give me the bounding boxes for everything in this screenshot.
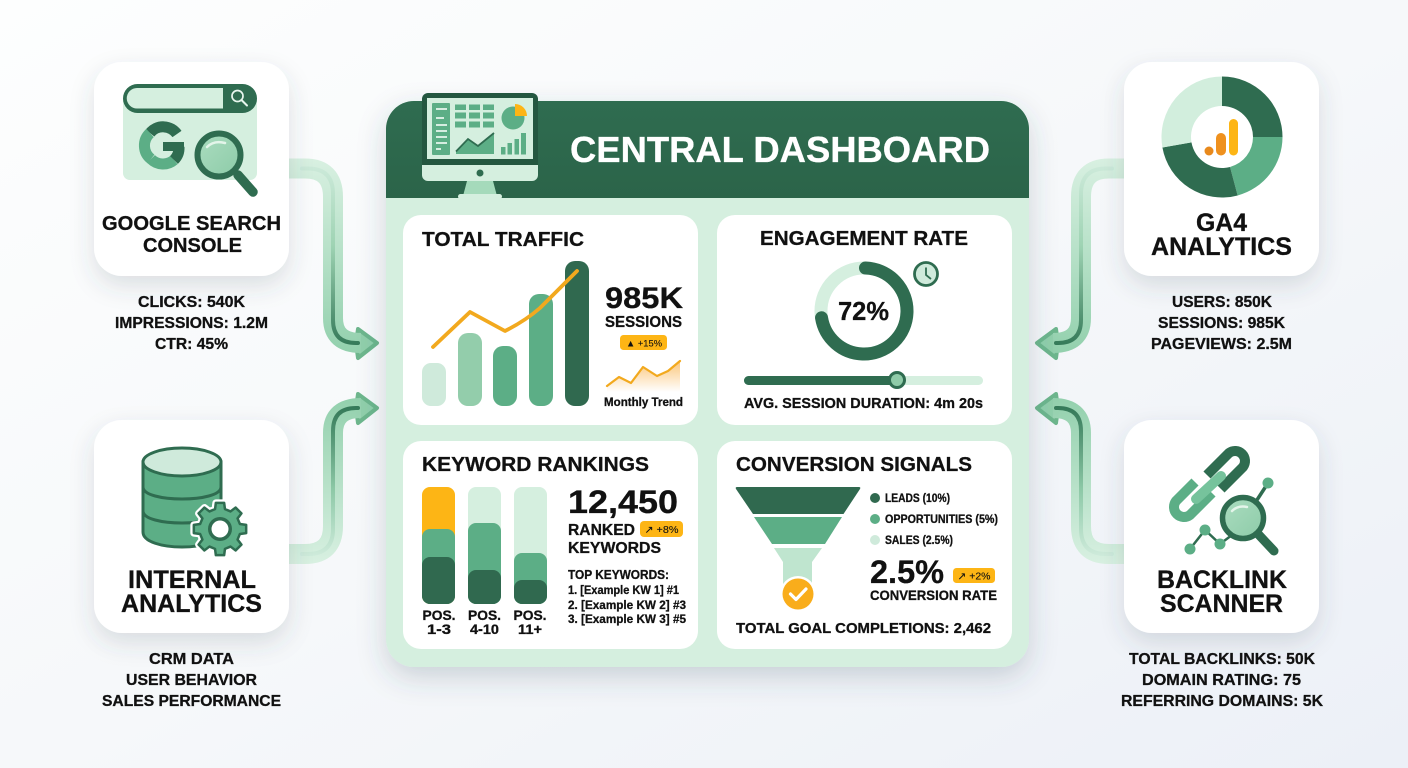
legend: SALES (2.5%): [885, 535, 953, 547]
heading: TOTAL TRAFFIC: [422, 229, 584, 251]
mini chart: monthly trend: [604, 361, 683, 409]
card title: [1151, 209, 1292, 261]
metric: sessions: [605, 282, 683, 331]
legend: [870, 493, 998, 547]
card title: [1157, 566, 1287, 618]
list: top keywords: TOP KEYWORDS:: [568, 568, 669, 582]
arrow: Google Search Console to dashboard: [289, 168, 377, 358]
text block: Search Console stats: CTR: 45%: [155, 336, 228, 353]
bar chart: traffic: [422, 261, 589, 406]
stacked bars: positions: 4-10: [470, 621, 499, 637]
metric: sessions: SESSIONS: [605, 314, 682, 331]
metric: conversion rate: CONVERSION RATE: [870, 587, 997, 603]
list: top keywords: 2. [Example KW 2] #3: [568, 598, 686, 612]
panel: keyword rankings: [403, 441, 698, 649]
icon: clock: [914, 262, 938, 286]
heading: ENGAGEMENT RATE: [760, 228, 968, 250]
card title: ANALYTICS: [1151, 233, 1292, 261]
card title: [102, 213, 281, 257]
legend: OPPORTUNITIES (5%): [885, 514, 998, 526]
metric: ranked keywords: RANKED: [568, 522, 635, 539]
list: top keywords: 3. [Example KW 3] #5: [568, 612, 686, 626]
list: top keywords: 1. [Example KW 1] #1: [568, 583, 679, 597]
text block: GA4 stats: USERS: 850K: [1172, 294, 1272, 311]
icon: chain link and magnifier: [1174, 451, 1274, 554]
card title: CONSOLE: [143, 235, 242, 257]
icon: GA4 donut: [1162, 76, 1282, 198]
panel: Google Search Console: [94, 62, 289, 276]
panel: GA4 Analytics: [1124, 62, 1319, 276]
icon: monitor: [422, 93, 538, 199]
stacked bars: positions: [422, 487, 547, 637]
badge: +2%: ↗ +2%: [958, 570, 990, 582]
stacked bars: positions: 11+: [518, 621, 542, 637]
icon: database with gear: [143, 448, 246, 555]
text block: Internal Analytics stats: CRM DATA: [149, 651, 234, 668]
text: average session duration: AVG. SESSION DURATION: 4m 20s: [744, 395, 983, 412]
list: top keywords: [568, 568, 686, 626]
text block: Backlink stats: TOTAL BACKLINKS: 50K: [1129, 651, 1315, 668]
arrow: Internal Analytics to dashboard: [289, 394, 377, 554]
card title: GA4: [1196, 209, 1247, 237]
text block: GA4 stats: SESSIONS: 985K: [1158, 315, 1285, 332]
text block: Backlink stats: [1121, 651, 1323, 710]
text block: Backlink stats: DOMAIN RATING: 75: [1142, 672, 1301, 689]
arrow: GA4 Analytics to dashboard: [1037, 168, 1125, 358]
badge: +15%: [620, 335, 667, 350]
text: total goal completions: TOTAL GOAL COMPLETIONS: 2,462: [736, 620, 991, 637]
slider: session duration: [744, 372, 983, 388]
icon: search console: [123, 84, 257, 192]
dashboard header bar: [386, 101, 1029, 198]
heading: KEYWORD RANKINGS: [422, 453, 649, 476]
dashboard title: CENTRAL DASHBOARD: [570, 129, 990, 170]
text block: Internal Analytics stats: USER BEHAVIOR: [126, 672, 257, 689]
text block: Search Console stats: [115, 294, 268, 353]
panel: engagement rate: [717, 215, 1012, 425]
panel: Backlink Scanner: [1124, 420, 1319, 633]
text block: Backlink stats: REFERRING DOMAINS: 5K: [1121, 693, 1323, 710]
stacked bars: positions: POS.: [468, 607, 501, 623]
mini chart: monthly trend: Monthly Trend: [604, 395, 683, 409]
text block: Search Console stats: CLICKS: 540K: [138, 294, 245, 311]
panel: Internal Analytics: [94, 420, 289, 633]
metric: ranked keywords: [568, 484, 678, 557]
badge: +2%: [953, 568, 995, 583]
metric: sessions: 985K: [605, 282, 683, 315]
card title: INTERNAL: [128, 566, 256, 594]
badge: +8%: [640, 521, 683, 537]
badge: +8%: ↗ +8%: [644, 524, 678, 536]
metric: ranked keywords: KEYWORDS: [568, 540, 661, 557]
text block: Search Console stats: IMPRESSIONS: 1.2M: [115, 315, 268, 332]
donut gauge: 72%: 72%: [838, 296, 889, 326]
card title: BACKLINK: [1157, 566, 1287, 594]
legend: LEADS (10%): [885, 493, 950, 505]
stacked bars: positions: POS.: [422, 607, 456, 623]
funnel chart: [736, 487, 860, 612]
badge: +15%: ▲ +15%: [626, 338, 663, 350]
text block: Internal Analytics stats: [102, 651, 281, 710]
text block: GA4 stats: [1151, 294, 1292, 353]
panel: total traffic: [403, 215, 698, 425]
arrow: Backlink Scanner to dashboard: [1037, 394, 1125, 554]
panel: central dashboard: [386, 93, 1029, 667]
card title: [121, 566, 262, 618]
text block: GA4 stats: PAGEVIEWS: 2.5M: [1151, 336, 1292, 353]
stacked bars: positions: 1-3: [427, 621, 451, 637]
card title: ANALYTICS: [121, 590, 262, 618]
text block: Internal Analytics stats: SALES PERFORMANCE: [102, 693, 281, 710]
card title: SCANNER: [1160, 590, 1283, 618]
metric: ranked keywords: 12,450: [568, 484, 678, 520]
metric: conversion rate: [870, 554, 997, 603]
card title: GOOGLE SEARCH: [102, 213, 281, 235]
donut gauge: 72%: [820, 267, 908, 355]
stacked bars: positions: POS.: [514, 607, 546, 623]
metric: conversion rate: 2.5%: [870, 554, 944, 590]
heading: CONVERSION SIGNALS: [736, 453, 972, 476]
panel: conversion signals: [717, 441, 1012, 649]
